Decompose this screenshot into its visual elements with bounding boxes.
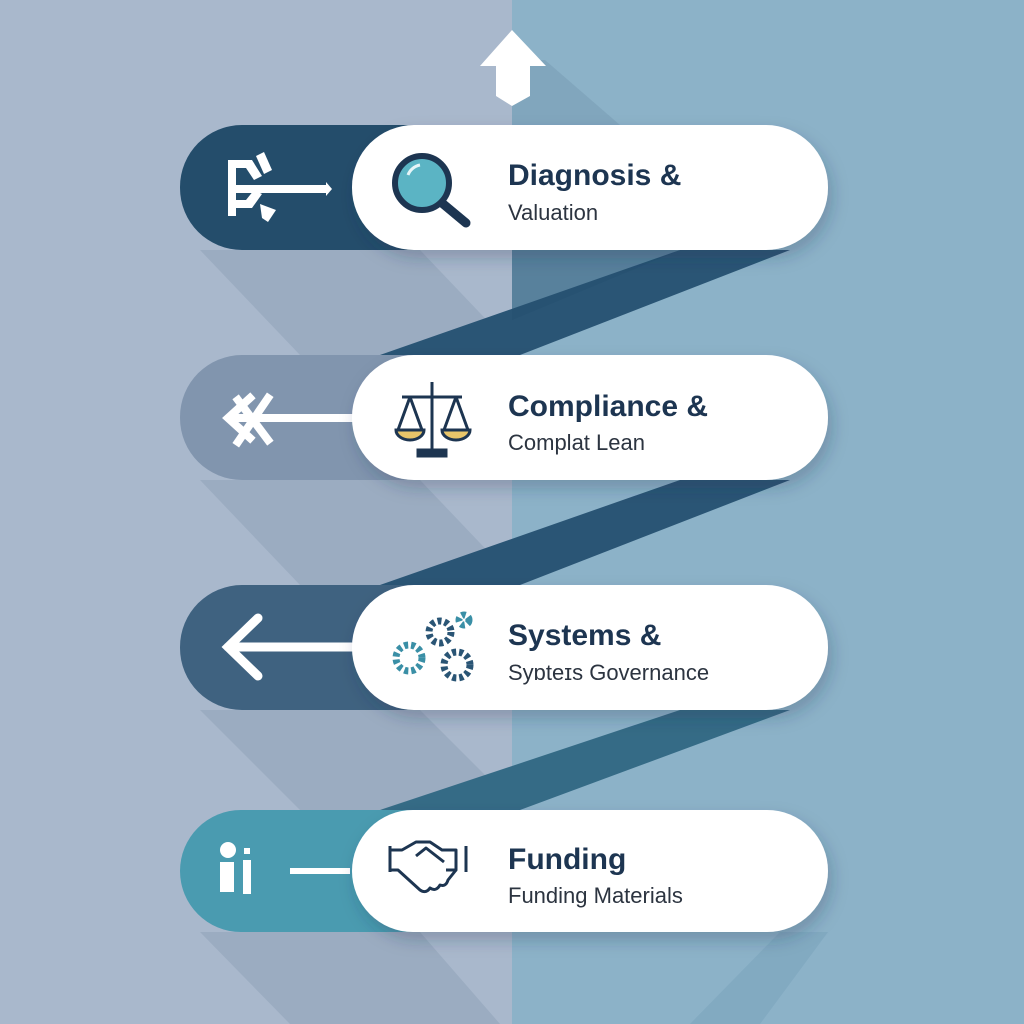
text: Diagnosis: Diagnosis &: [508, 159, 681, 192]
row 4: Funding: [180, 810, 828, 932]
arrow: top up arrow: [480, 30, 546, 106]
icon: arrow left with cross: [228, 398, 352, 442]
icon: magnifier: [395, 156, 466, 223]
soft diagonal shadows: [200, 60, 620, 1024]
row 1: Diagnosis & Valuation: [180, 125, 828, 250]
icon: gears: [396, 615, 470, 678]
text: Systems: Systems &: [508, 619, 661, 652]
text: Compliance: [508, 390, 708, 455]
row 2: Compliance: [180, 355, 828, 480]
text: Funding: Funding: [508, 843, 626, 876]
text: Diagnosis: Valuation: [508, 200, 598, 225]
text: Funding: [508, 843, 683, 908]
text: Diagnosis: [508, 159, 681, 225]
icon: left arrow: [228, 618, 352, 676]
row 3: Systems: [180, 585, 828, 710]
text: Systems: Syɒteɪs Governance: [508, 660, 709, 685]
text: Systems: [508, 619, 709, 685]
text: Funding: Funding Materials: [508, 883, 683, 908]
icon: scales: [396, 382, 470, 456]
icon: people: [220, 842, 350, 894]
connector bands: [380, 250, 828, 1024]
text: Compliance: Compliance &: [508, 390, 708, 423]
text: Compliance: Complat Lean: [508, 430, 645, 455]
icon: handshake: [390, 842, 466, 892]
icon: split arrows: [228, 152, 332, 222]
